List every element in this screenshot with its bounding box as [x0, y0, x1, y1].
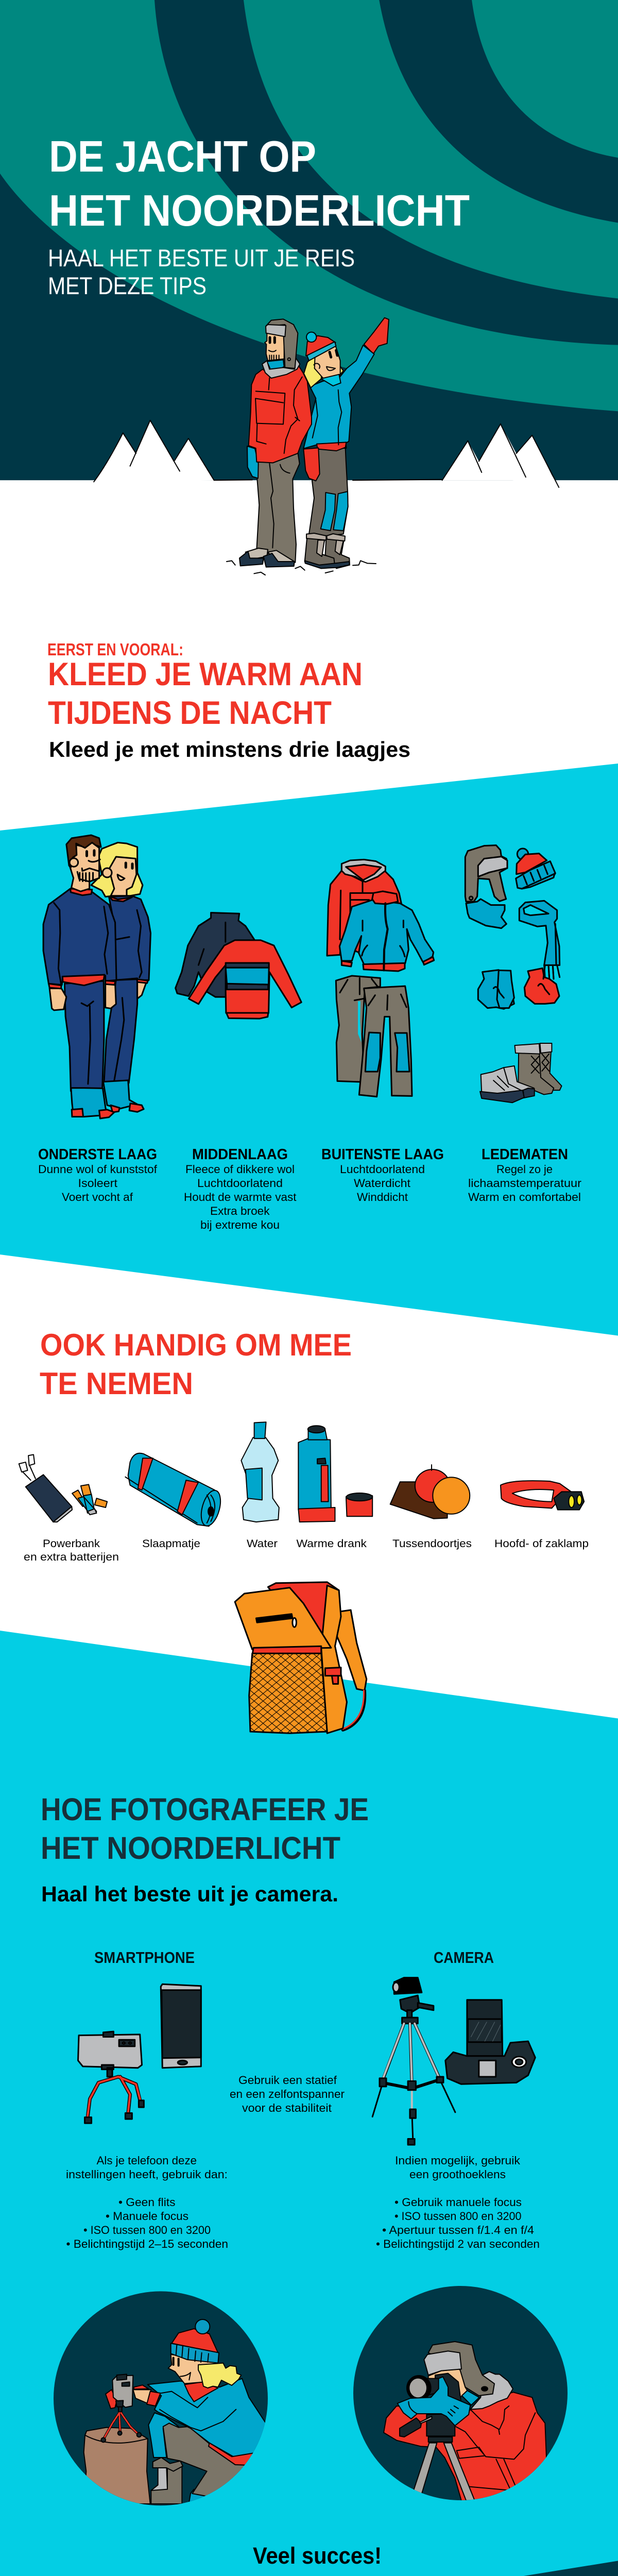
text: drie laagjes: Kleed je met minstens drie laagjes: [49, 737, 410, 761]
text: camera tips: • ISO tussen 800 en 3200: [394, 2210, 521, 2223]
woman: [303, 318, 389, 568]
icons: handy items: [19, 1422, 584, 1528]
text: camera tips: [376, 2154, 540, 2250]
heading: eerst en vooral: [47, 640, 363, 731]
circle illustration: woman photographing with smartphone: [54, 2291, 268, 2505]
text: veel succes: Veel succes!: [253, 2543, 382, 2569]
labels: item names: Warme drank: [297, 1537, 367, 1550]
title: HET NOORDERLICHT: [49, 187, 470, 235]
panel: clothing section background: [0, 764, 618, 1335]
text: smartphone tips: • Belichtingstijd 2–15 seconden: [66, 2238, 228, 2250]
label: ledematen: LEDEMATEN: [482, 1146, 568, 1163]
text: camera tips: een groothoeklens: [409, 2168, 506, 2181]
mittens: [478, 965, 559, 1009]
label: onderste laag: ONDERSTE LAAG: [38, 1146, 157, 1163]
panel: hero aurora sky: [0, 0, 618, 480]
label: buitenste laag: Luchtdoorlatend: [340, 1163, 425, 1176]
labels: item names: Tussendoortjes: [392, 1537, 472, 1550]
woman in base layer: [91, 842, 150, 1112]
labels: item names: Slaapmatje: [142, 1537, 200, 1550]
label: buitenste laag: Waterdicht: [354, 1177, 411, 1190]
labels: item names: en extra batterijen: [24, 1551, 119, 1563]
heading: ook handig: TE NEMEN: [40, 1366, 193, 1401]
heading: eerst en vooral: EERST EN VOORAL:: [47, 640, 183, 659]
icon: thermos and cup: [298, 1426, 372, 1522]
illustration: two people looking at the aurora: [227, 318, 389, 575]
mountains and snow horizon: [94, 420, 559, 487]
text: statief tip: [230, 2074, 345, 2114]
text: camera tips: Indien mogelijk, gebruik: [395, 2154, 521, 2167]
text: statief tip: voor de stabiliteit: [242, 2102, 332, 2114]
label: onderste laag: Isoleert: [78, 1177, 118, 1190]
icon: headlamp: [501, 1481, 584, 1510]
heading: ook handig: OOK HANDIG OM MEE: [40, 1328, 352, 1362]
subtitle: MET DEZE TIPS: [48, 272, 207, 299]
labels: item names: Powerbank: [43, 1537, 100, 1550]
label: onderste laag: Dunne wol of kunststof: [38, 1163, 158, 1176]
heading: camera: CAMERA: [434, 1948, 494, 1967]
illustration: outer layer clothing: [327, 845, 560, 1097]
illustration: couple in base layer: [43, 835, 150, 1118]
heading: ook handig: [40, 1328, 352, 1401]
labels: item names: [24, 1537, 589, 1563]
text: smartphone tips: • Manuele focus: [106, 2210, 188, 2223]
illustration: camera on tripod: [372, 1978, 535, 2145]
snow tufts: [227, 561, 376, 575]
text: camera tips: • Gebruik manuele focus: [394, 2196, 522, 2209]
label: middenlaag: [184, 1146, 297, 1231]
label: buitenste laag: [321, 1146, 444, 1204]
label: ledematen: Regel zo je: [496, 1163, 553, 1176]
label: buitenste laag: BUITENSTE LAAG: [321, 1146, 444, 1163]
label: middenlaag: MIDDENLAAG: [192, 1146, 288, 1163]
knit cap: [516, 849, 555, 889]
outer trousers: [336, 976, 412, 1097]
label: middenlaag: Luchtdoorlatend: [197, 1177, 283, 1190]
text: smartphone tips: • ISO tussen 800 en 3200: [83, 2224, 211, 2236]
text: camera tips: • Belichtingstijd 2 van seconden: [376, 2238, 540, 2250]
text: statief tip: en een zelfontspanner: [230, 2088, 345, 2100]
icon: sleeping mat: [125, 1453, 224, 1528]
label: middenlaag: Extra broek: [210, 1205, 270, 1217]
hat with ear flaps: [465, 845, 507, 928]
text: camera tips: • Apertuur tussen f/1.4 en f/4: [382, 2224, 534, 2236]
labels: item names: Water: [247, 1537, 278, 1550]
label: onderste laag: Voert vocht af: [62, 1191, 133, 1204]
label: middenlaag: Houdt de warmte vast: [184, 1191, 297, 1204]
outer jackets: [327, 859, 434, 971]
heading: eerst en vooral: TIJDENS DE NACHT: [48, 695, 332, 731]
heading: smartphone: SMARTPHONE: [94, 1948, 195, 1967]
heading: eerst en vooral: KLEED JE WARM AAN: [48, 656, 363, 692]
circle illustration: man photographing with camera on tripod: [353, 2286, 568, 2502]
label: ledematen: Warm en comfortabel: [468, 1191, 581, 1204]
panel: footer background: [0, 2561, 618, 2576]
text: smartphone tips: • Geen flits: [118, 2196, 175, 2209]
label: middenlaag: bij extreme kou: [200, 1218, 280, 1231]
scarf: [519, 901, 560, 979]
label: buitenste laag: Winddicht: [357, 1191, 408, 1204]
label: ledematen: [468, 1146, 582, 1204]
illustration: boots and hiking shoes: [480, 1043, 562, 1103]
label: ledematen: lichaamstemperatuur: [468, 1177, 582, 1190]
subtitle: [48, 244, 355, 299]
label: onderste laag: [38, 1146, 158, 1204]
icon: backpack: [235, 1582, 367, 1733]
labels: item names: Hoofd- of zaklamp: [494, 1537, 589, 1550]
title: DE JACHT OP: [49, 132, 316, 181]
labels: clothing layers: [38, 1146, 582, 1231]
heading: hoe fotografeer je: HOE FOTOGRAFEER JE: [41, 1792, 369, 1827]
panel: photo section background: [0, 1631, 618, 2576]
heading: hoe fotografeer je: [41, 1792, 369, 1866]
illustration: smartphones and flexible tripod: [78, 1984, 201, 2123]
text: smartphone tips: Als je telefoon deze: [97, 2154, 197, 2167]
text: haal het beste uit je camera: Haal het beste uit je camera.: [41, 1882, 338, 1906]
icon: water bottle: [241, 1422, 279, 1522]
man: [239, 319, 312, 567]
subtitle: HAAL HET BESTE UIT JE REIS: [48, 244, 355, 272]
text: smartphone tips: instellingen heeft, gebruik dan:: [66, 2168, 228, 2181]
text: statief tip: Gebruik een statief: [238, 2074, 337, 2087]
text: smartphone tips: [66, 2154, 228, 2250]
heading: hoe fotografeer je: HET NOORDERLICHT: [41, 1831, 340, 1866]
illustration: middle layer clothing: [176, 912, 301, 1019]
title: [49, 132, 470, 235]
icon: powerbank and batteries: [19, 1454, 107, 1522]
label: middenlaag: Fleece of dikkere wol: [185, 1163, 295, 1176]
icon: snacks: [390, 1465, 470, 1519]
man in base layer: [43, 835, 116, 1118]
